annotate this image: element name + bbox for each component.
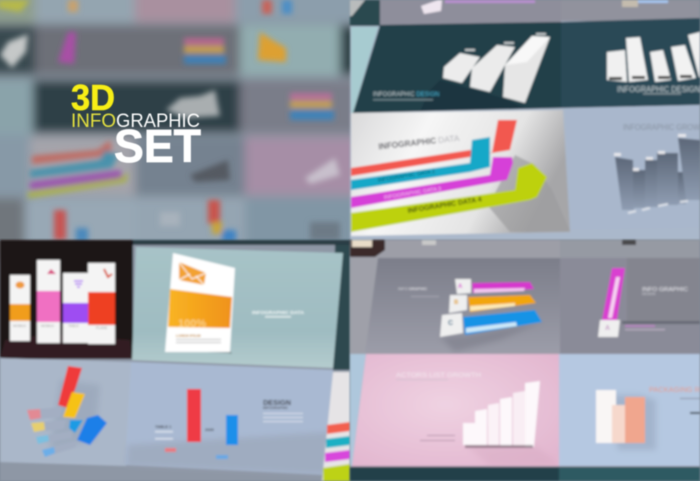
- panel: grey magenta bar slide: [560, 258, 700, 354]
- panel: blue-grey design chart: INFOGRAPHIC: [263, 406, 289, 410]
- panel: ribbon infographic: DATA: [438, 133, 460, 145]
- panel: teal email card: INFOGRAPHIC DATA: [252, 310, 305, 315]
- panel: top right slides: [350, 0, 700, 240]
- lime ribbon: [351, 163, 547, 232]
- panel: dark panel with white columns: PLANE: [96, 326, 108, 330]
- title: 3D Infographic Set: 3D: [71, 77, 115, 118]
- panel: dark panel with white columns: [0, 240, 133, 359]
- panel: grey magenta bar slide: A: [605, 325, 610, 332]
- panel: dark panel with white columns: TABLE: [68, 324, 79, 328]
- panel: grey magenta bar slide: INFO GRAPHIC: [642, 287, 688, 293]
- panel: dark teal white bars: [561, 18, 700, 108]
- panel: grey ABC ribbons: A: [458, 284, 463, 290]
- panel: bottom left slides: [0, 240, 350, 481]
- panel: ribbon infographic: [351, 110, 570, 236]
- teal ribbon: [351, 137, 490, 190]
- panel: dark teal 3D bars: [351, 22, 561, 113]
- red ribbon: [351, 120, 517, 176]
- panel: ribbon infographic: INFOGRAPHIC DATA 2: [377, 169, 435, 184]
- panel: dark panel with white columns: MOBILE: [13, 324, 27, 328]
- panel: teal email card: [132, 247, 343, 368]
- title: 3D Infographic Set: INFO: [71, 111, 116, 132]
- panel: blue-grey design chart: TABLE 1: [155, 424, 172, 429]
- title: 3D Infographic Set: GRAPHIC: [116, 111, 200, 132]
- panel: pink growth chart: [350, 354, 560, 466]
- side strip: dark teal: [333, 245, 350, 370]
- panel: dark teal 3D bars: INFOGRAPHIC DESIGN: [373, 92, 439, 98]
- panel: blue-grey design chart: 2020: [205, 427, 215, 432]
- panel: pink growth chart: ACTORS LIST GROWTH: [396, 372, 481, 379]
- panel: grey magenta bar slide: DESIGN: [642, 292, 656, 296]
- panel: dark panel with white columns: MOBILE: [41, 324, 55, 328]
- title: 3D Infographic Set: SET: [114, 120, 201, 172]
- panel: grey ABC ribbons: C: [448, 320, 453, 327]
- panel: bottom right slides: [350, 240, 700, 481]
- panel: grey-blue column chart: [565, 105, 700, 230]
- blurred thumbnails grid: [0, 0, 360, 260]
- panel: ribbon infographic: INFOGRAPHIC DATA 3: [384, 186, 442, 201]
- panel: grey ABC ribbons: [350, 258, 560, 354]
- panel: blue bar chart: [559, 354, 700, 466]
- panel: blurred thumbnail wall with title: [0, 0, 360, 260]
- strip: cropped top slides: [350, 0, 700, 26]
- panel: grey ABC ribbons: INFO GRAPHIC: [398, 286, 427, 291]
- panel: ribbon infographic: INFOGRAPHIC: [378, 135, 437, 151]
- white column with ribbon stripes: [322, 372, 350, 481]
- panel: blue-grey design chart: DESIGN: [263, 398, 291, 407]
- panel: blue bar chart: PACKAGING R: [649, 387, 700, 394]
- title: 3D Infographic Set: [71, 77, 201, 172]
- panel: teal email card: LOREM IPSUM: [176, 334, 201, 338]
- strip: slides above: [350, 240, 700, 258]
- panel: blue-grey design chart: [125, 362, 333, 475]
- panel: ribbon infographic: INFOGRAPHIC DATA 4: [407, 196, 482, 215]
- panel: grey ABC ribbons: B: [454, 300, 459, 306]
- blurred chart shapes: [0, 0, 340, 242]
- panel: teal email card: 100%: [178, 318, 206, 330]
- panel: blue-grey 3D bars: [0, 358, 133, 466]
- footer: dark teal strip: [350, 467, 700, 481]
- magenta ribbon: [351, 157, 513, 208]
